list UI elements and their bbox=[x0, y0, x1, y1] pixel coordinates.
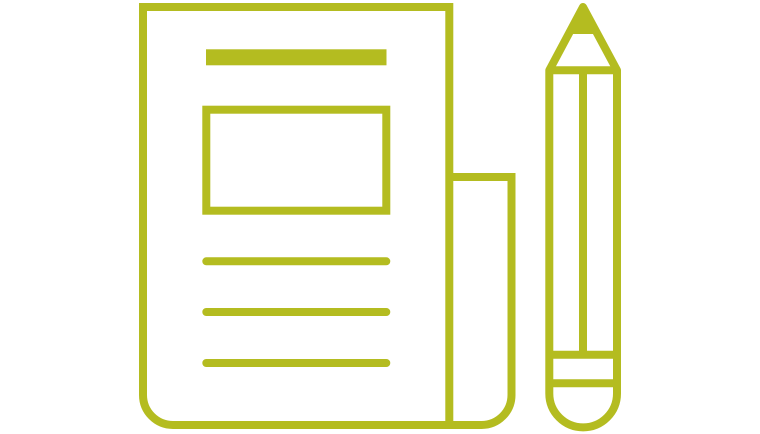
tip base line bbox=[549, 66, 617, 74]
eraser band lines bbox=[549, 355, 617, 383]
pencil tip bbox=[572, 17, 594, 34]
centre line bbox=[579, 70, 587, 355]
text lines bbox=[206, 261, 386, 363]
headline bar bbox=[206, 49, 386, 65]
newspaper page and fold outline bbox=[143, 7, 512, 429]
icon: newspaper bbox=[143, 7, 512, 429]
icon: pencil bbox=[549, 7, 617, 427]
tip fill bbox=[568, 7, 598, 34]
image placeholder bbox=[206, 110, 386, 211]
pencil body outline bbox=[549, 7, 617, 427]
